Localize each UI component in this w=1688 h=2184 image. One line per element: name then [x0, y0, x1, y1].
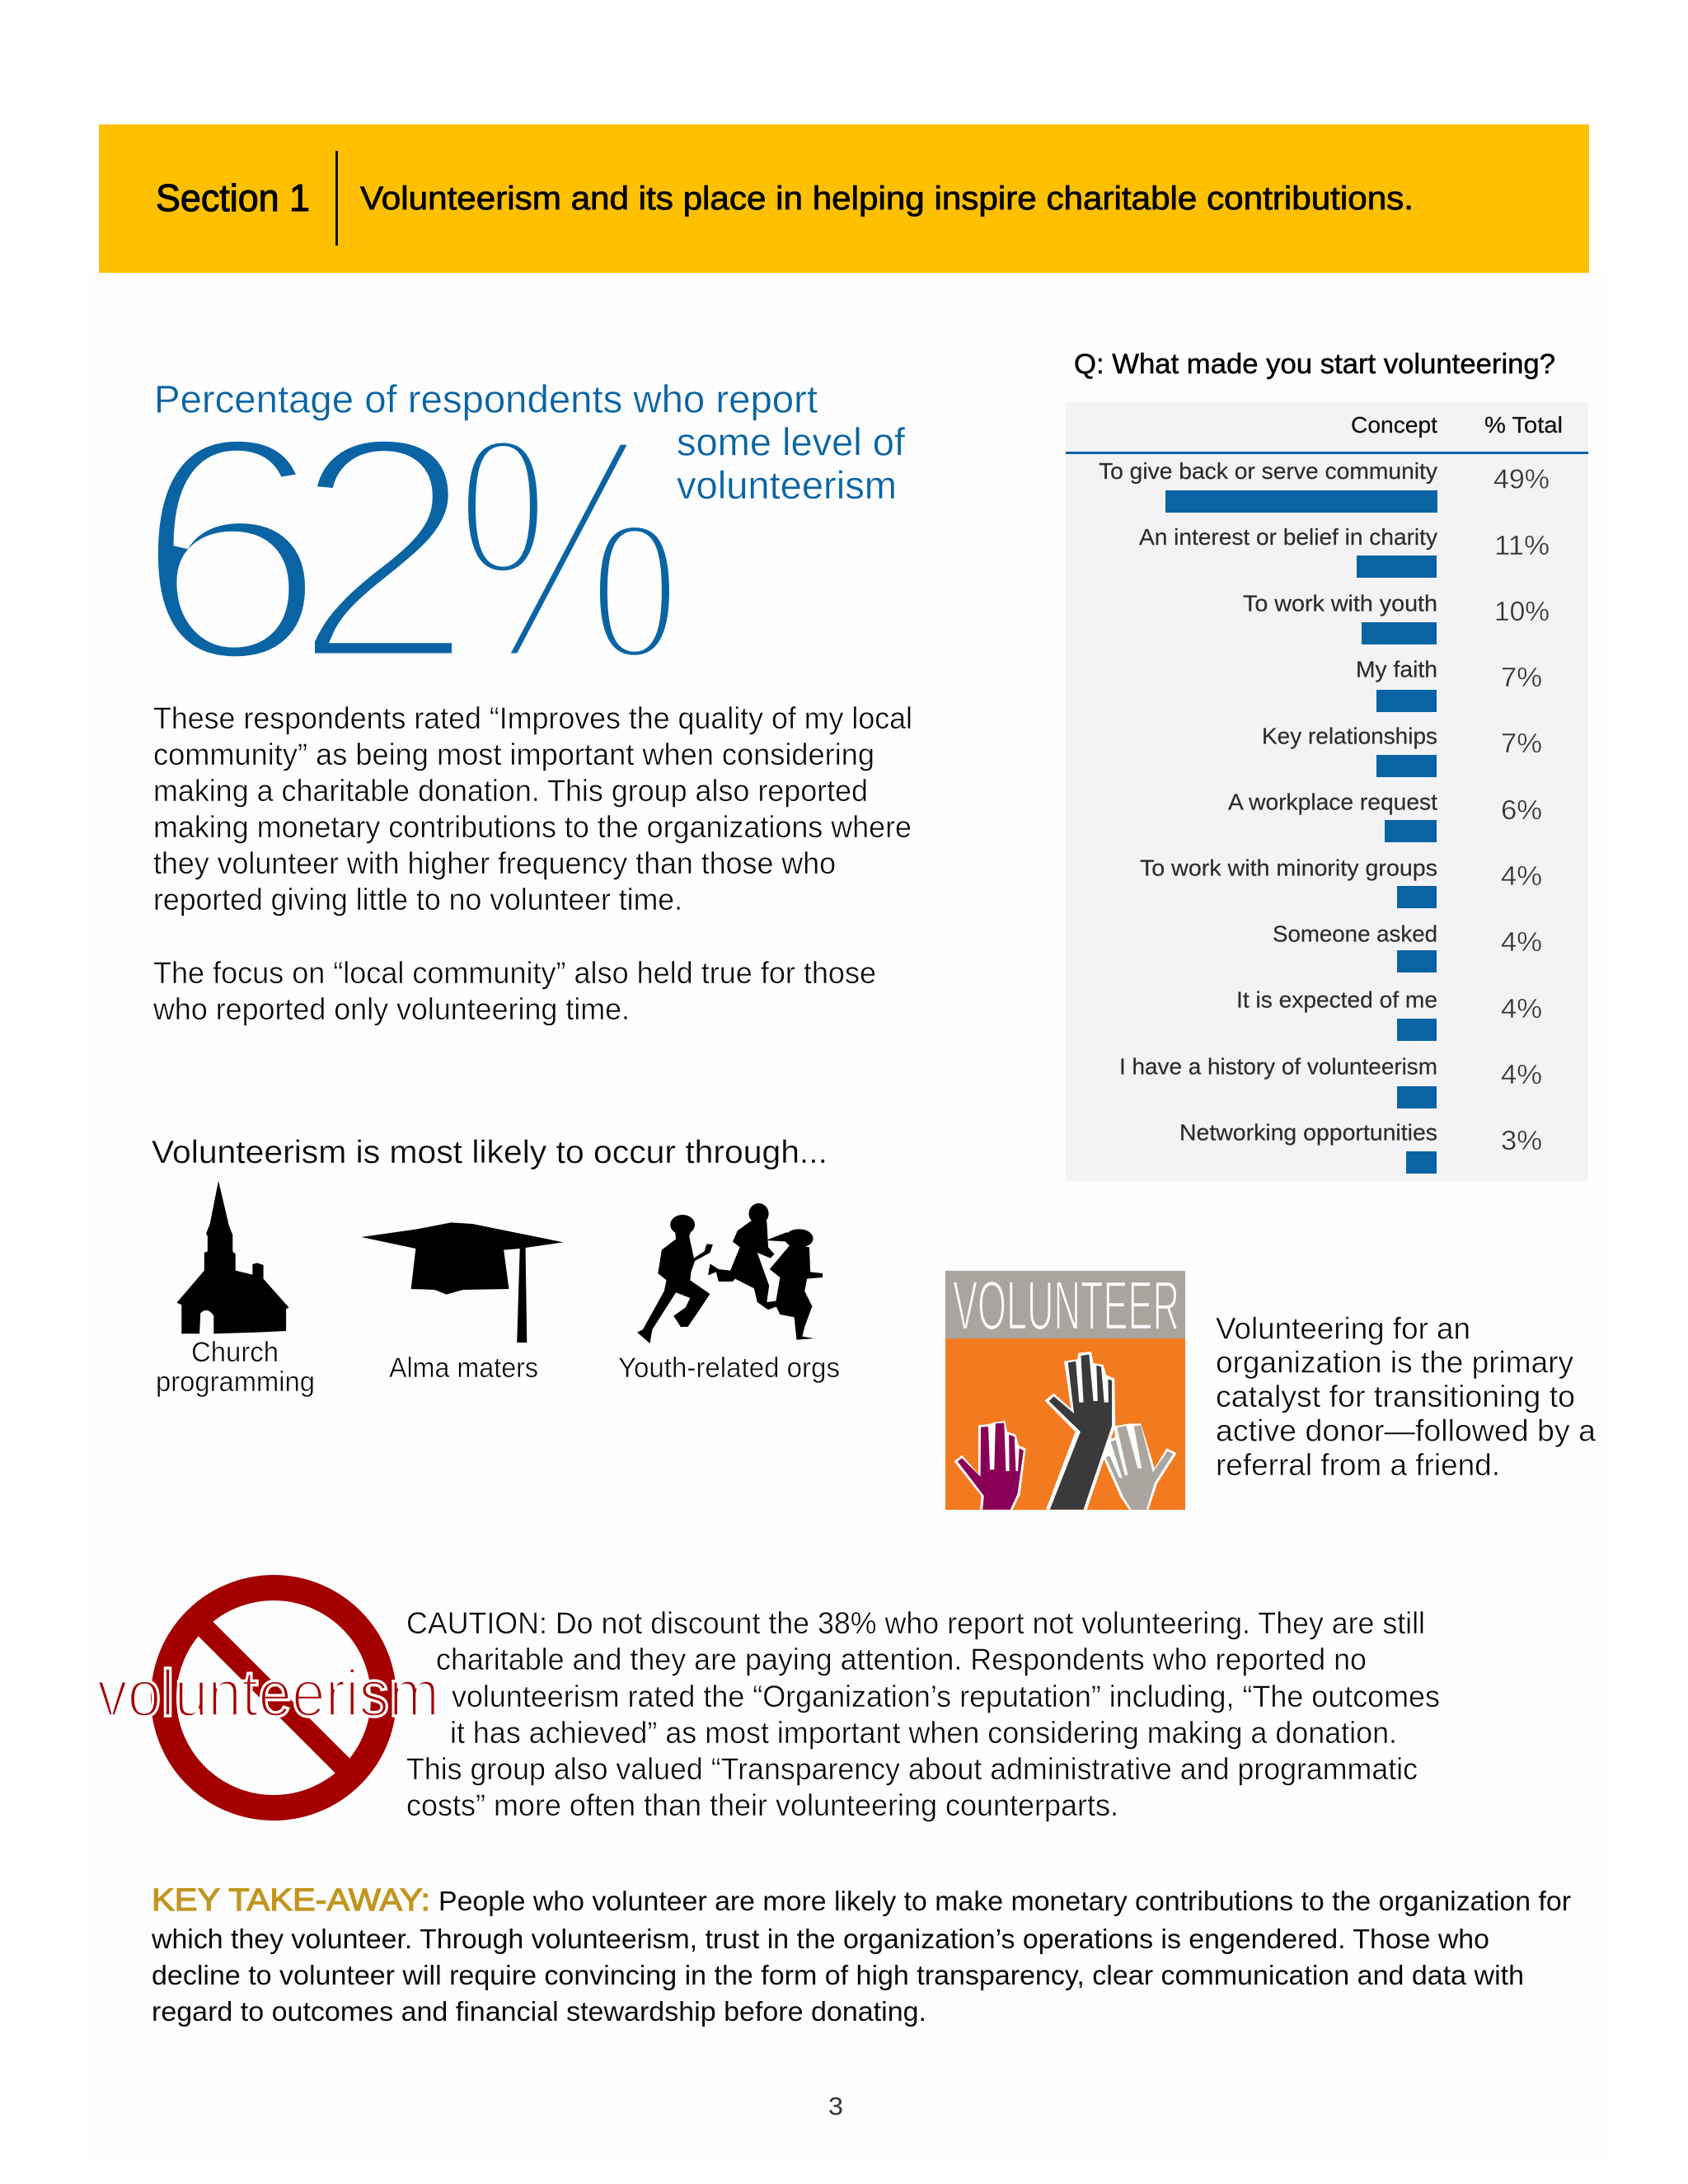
text block: primary catalyst: catalyst for transitioning to [1216, 1380, 1575, 1413]
row: someone asked [1273, 921, 1542, 972]
chart question heading: Q: What made you start volunteering? [1074, 349, 1555, 380]
label: church programming: Church [191, 1337, 279, 1368]
row: faith: 7% [1501, 662, 1542, 692]
row: expected [1236, 987, 1542, 1041]
row: minority groups: 4% [1501, 860, 1542, 891]
icon: graduation cap [361, 1222, 563, 1384]
label: church programming: programming [156, 1366, 315, 1398]
text block: primary catalyst: referral from a friend. [1216, 1448, 1500, 1482]
row: charity: 11% [1494, 530, 1550, 560]
row: history: I have a history of volunteerism [1119, 1053, 1437, 1080]
statistic caption: Percentage of respondents who report [154, 377, 818, 420]
caution text: charitable and they are paying attention. Respondents who reported no [436, 1643, 1367, 1676]
row: faith [1356, 656, 1542, 712]
row: youth: 10% [1494, 596, 1550, 626]
row: charity: An interest or belief in charity [1139, 524, 1437, 550]
body text: local community: making monetary contributions to the organizations where [153, 810, 912, 844]
label: youth-related orgs: Youth-related orgs [618, 1352, 840, 1384]
row: networking: 3% [1501, 1125, 1542, 1155]
icon: running children [618, 1203, 840, 1384]
body text: local community: reported giving little to no volunteer time. [153, 883, 682, 916]
row: give back: To give back or serve community [1099, 458, 1437, 484]
text block: primary catalyst: Volunteering for an [1216, 1312, 1470, 1345]
row: someone asked: Someone asked [1273, 921, 1437, 946]
row: give back [1099, 458, 1550, 513]
table header [1351, 412, 1563, 438]
row: history [1119, 1053, 1542, 1108]
poster word: VOLUNTEER [953, 1267, 1179, 1344]
key take-away text: which they volunteer. Through volunteerism, trust in the organization’s operations is engendered. Those who [151, 1924, 1489, 1955]
table header: % Total [1484, 412, 1563, 438]
row: charity [1139, 524, 1550, 578]
row: youth [1243, 590, 1550, 644]
volunteer poster image [945, 1267, 1185, 1510]
big number [133, 368, 684, 729]
row: expected: It is expected of me [1236, 987, 1437, 1012]
row: history: 4% [1501, 1059, 1542, 1090]
body text: local community [152, 701, 912, 1026]
row: workplace: A workplace request [1228, 790, 1437, 814]
row: faith: My faith [1356, 656, 1437, 682]
row: youth: To work with youth [1243, 590, 1437, 616]
big number: 6 [133, 368, 328, 729]
statistic caption: some level of [677, 420, 906, 463]
row: workplace [1228, 790, 1542, 842]
row: networking: Networking opportunities [1179, 1119, 1437, 1146]
text block: primary catalyst [1216, 1312, 1596, 1482]
row: expected: 4% [1501, 993, 1542, 1024]
body text: local community: making a charitable donation. This group also reported [153, 774, 868, 808]
row: minority groups [1140, 855, 1542, 908]
row: workplace: 6% [1501, 794, 1542, 825]
key take-away text: regard to outcomes and financial stewardship before donating. [152, 1997, 926, 2027]
icon: church [156, 1181, 315, 1398]
row: relationships: 7% [1501, 728, 1542, 758]
key take-away label: KEY TAKE-AWAY: [152, 1883, 430, 1918]
icon: no volunteerism sign [97, 1587, 439, 1808]
key take-away text [151, 1886, 1571, 2027]
row: give back: 49% [1493, 463, 1550, 494]
statistic caption [154, 377, 906, 507]
caution text: volunteerism rated the “Organization’s reputation” including, “The outcomes [452, 1680, 1440, 1713]
body text: local community: they volunteer with higher frequency than those who [153, 846, 836, 880]
key take-away text: decline to volunteer will require convincing in the form of high transparency, clear communication and data with [152, 1961, 1524, 1991]
statistic: 62 percent volunteerism [133, 368, 906, 729]
body text: local community: community” as being most important when considering [153, 738, 874, 771]
section banner [99, 124, 1589, 273]
big number: % [453, 368, 684, 729]
icon: raised hands [954, 1352, 1177, 1510]
key take-away [151, 1883, 1571, 2027]
caution text [406, 1606, 1440, 1822]
body text: local community: These respondents rated “Improves the quality of my local [153, 701, 912, 735]
bar chart table [1066, 402, 1588, 1181]
heading: likely to occur through: Volunteerism is most likely to occur through... [152, 1135, 828, 1170]
caution text: costs” more often than their volunteering counterparts. [406, 1788, 1118, 1822]
text block: primary catalyst: active donor—followed by a [1216, 1414, 1596, 1447]
label: alma maters: Alma maters [389, 1352, 538, 1384]
caution text: CAUTION: Do not discount the 38% who report not volunteering. They are still [406, 1606, 1425, 1640]
big number: 2 [291, 368, 476, 729]
body text: local community: who reported only volunteering time. [152, 992, 630, 1026]
label: church programming [156, 1337, 315, 1398]
row: someone asked: 4% [1501, 926, 1542, 957]
page number: 3 [828, 2092, 843, 2121]
table header: Concept [1351, 412, 1437, 438]
word: volunteerism: volunteerism [97, 1657, 439, 1730]
statistic caption: volunteerism [677, 463, 897, 507]
row: networking [1179, 1119, 1542, 1174]
section title: Volunteerism and its place in helping inspire charitable contributions. [360, 180, 1414, 217]
row: minority groups: To work with minority groups [1140, 855, 1437, 880]
row: relationships [1262, 724, 1542, 777]
caution text: This group also valued “Transparency about administrative and programmatic [406, 1752, 1418, 1786]
text block: primary catalyst: organization is the primary [1216, 1345, 1573, 1380]
key take-away text: People who volunteer are more likely to make monetary contributions to the organization for [438, 1886, 1571, 1917]
caution text: it has achieved” as most important when considering making a donation. [450, 1716, 1397, 1750]
body text: local community: The focus on “local community” also held true for those [153, 956, 876, 990]
row: relationships: Key relationships [1262, 724, 1437, 748]
section label: Section 1 [156, 176, 310, 219]
